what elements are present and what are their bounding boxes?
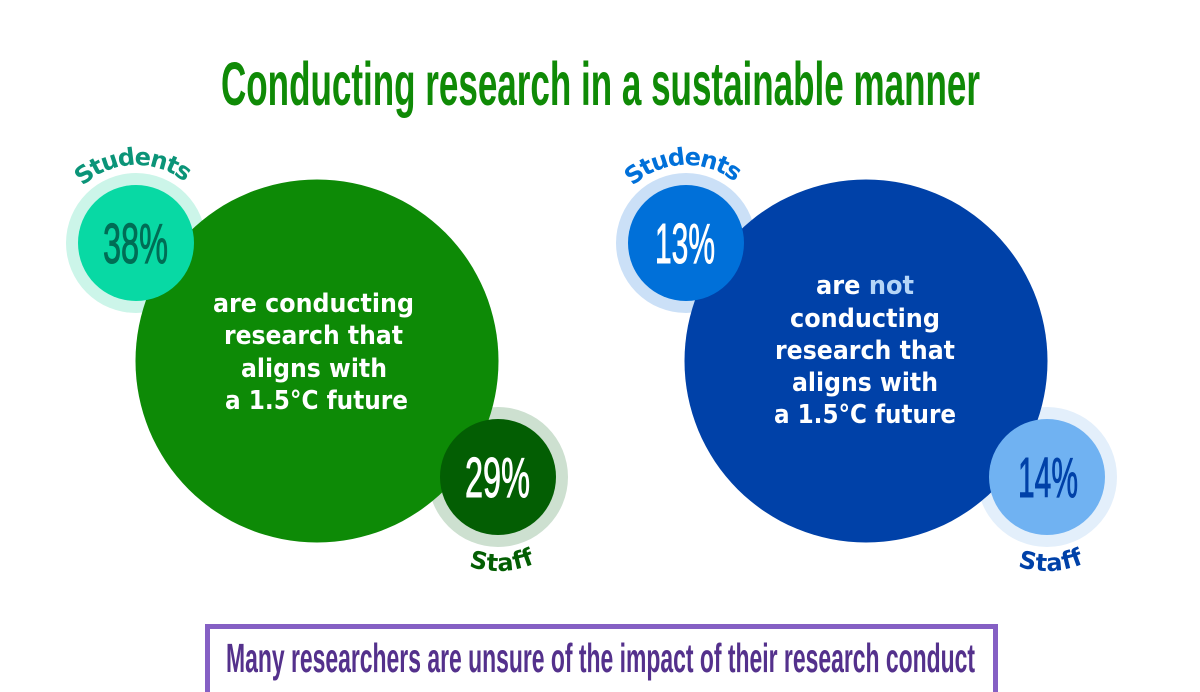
panel: green researchers conducting aligned research — [66, 146, 568, 572]
staff bubble blue — [989, 419, 1105, 535]
students label green: Students — [75, 146, 190, 184]
icon: staff ring blue — [977, 407, 1117, 547]
students percentage 38: 38% — [103, 212, 168, 276]
icon: students ring blue — [616, 173, 756, 313]
statement blue: a 1.5°C future — [774, 400, 956, 430]
students percentage 13: 13% — [655, 212, 715, 276]
staff bubble green — [440, 419, 556, 535]
statement blue — [774, 271, 956, 430]
callout — [208, 626, 996, 692]
statement green — [213, 289, 414, 416]
staff percentage 29: 29% — [465, 446, 530, 510]
statement blue: are not — [816, 271, 914, 301]
statement green: a 1.5°C future — [225, 386, 408, 416]
panel: blue researchers not conducting aligned research — [616, 146, 1117, 572]
statement blue: conducting — [790, 304, 940, 334]
main green circle — [136, 180, 498, 542]
statement blue: research that — [775, 336, 955, 366]
main blue circle — [684, 180, 1048, 542]
students bubble blue — [628, 185, 744, 301]
statement blue: aligns with — [792, 368, 938, 398]
staff percentage 14: 14% — [1018, 446, 1078, 510]
staff label green: Staff — [470, 546, 532, 572]
staff label blue: Staff — [1020, 546, 1080, 572]
icon: staff ring green — [428, 407, 568, 547]
statement green: research that — [224, 321, 403, 351]
students bubble green — [78, 185, 194, 301]
icon: students ring green — [66, 173, 206, 313]
statement green: aligns with — [241, 354, 387, 384]
students label blue: Students — [625, 146, 740, 184]
statement green: are conducting — [213, 289, 414, 319]
